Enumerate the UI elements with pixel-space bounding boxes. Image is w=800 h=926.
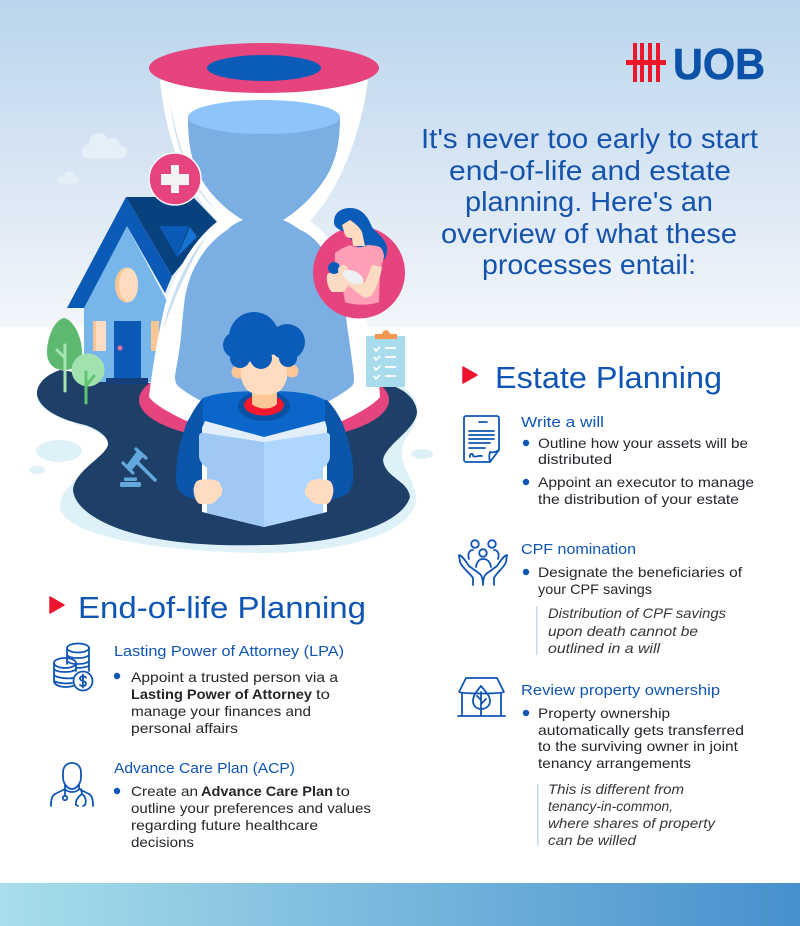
face	[241, 350, 287, 395]
icon: coins	[54, 644, 92, 690]
block: write a will: the distribution of your estate	[538, 491, 739, 507]
block: lasting power of attorney: Lasting Power of Attorney	[131, 686, 312, 702]
icon: clipboard	[366, 330, 405, 387]
clouds	[58, 133, 127, 184]
block: review property ownership: tenancy-in-common,	[548, 798, 673, 814]
icon: gavel	[120, 449, 155, 487]
block: cpf nomination: Designate the beneficiaries of	[538, 564, 742, 580]
title: overview of what these	[441, 218, 737, 249]
hourglass base	[139, 358, 389, 442]
panel: estate planning	[458, 360, 754, 848]
block: cpf nomination: outlined in a will	[548, 640, 661, 656]
block: advance care plan: regarding future healthcare	[131, 817, 318, 833]
block: advance care plan: Advance Care Plan	[201, 783, 333, 799]
block: write a will: Outline how your assets will be	[538, 435, 748, 451]
sand surface	[188, 100, 340, 134]
glass shading	[163, 102, 215, 330]
title: processes entail:	[482, 249, 696, 280]
block: lasting power of attorney: personal affairs	[131, 720, 238, 736]
arms and body	[176, 398, 353, 500]
block: review property ownership	[521, 683, 744, 848]
block: lasting power of attorney: Appoint a trusted person via a	[131, 669, 338, 685]
footer band	[0, 883, 800, 926]
block: cpf nomination: your CPF savings	[538, 581, 652, 597]
sand lower	[175, 220, 354, 402]
block: advance care plan: to	[336, 783, 350, 799]
block: lasting power of attorney: manage your finances and	[131, 703, 311, 719]
logo: UOB	[626, 40, 765, 89]
heading: end-of-life planning: End-of-life Planning	[78, 590, 366, 625]
block: write a will: distributed	[538, 451, 612, 467]
illustration: hourglass scene	[29, 43, 433, 553]
ground blobs	[29, 385, 433, 553]
hourglass glass	[149, 80, 380, 440]
block: cpf nomination: upon death cannot be	[548, 623, 698, 639]
sand upper	[188, 117, 340, 220]
block: review property ownership: Property ownership	[538, 705, 670, 721]
block: write a will	[521, 415, 754, 507]
block: lasting power of attorney: to	[316, 686, 330, 702]
block: review property ownership: to the surviving owner in joint	[538, 738, 738, 754]
block: advance care plan: Create an	[131, 783, 198, 799]
block: cpf nomination: CPF nomination	[521, 542, 636, 558]
icon: doctor	[51, 763, 93, 806]
block: review property ownership: can be willed	[548, 832, 637, 848]
sky background	[0, 0, 800, 327]
block: advance care plan: decisions	[131, 834, 194, 850]
panel: end-of-life planning	[50, 590, 371, 850]
block: review property ownership: where shares of property	[548, 815, 716, 831]
block: write a will: Appoint an executor to manage	[538, 474, 754, 490]
hourglass top opening	[207, 55, 321, 81]
block: advance care plan: outline your preferences and values	[131, 800, 371, 816]
marker: end-of-life planning	[50, 597, 64, 613]
block: review property ownership: This is different from	[548, 781, 684, 797]
block: cpf nomination: Distribution of CPF savings	[548, 605, 726, 621]
block: advance care plan	[114, 761, 371, 850]
hourglass top	[149, 43, 379, 93]
block: advance care plan: Advance Care Plan (ACP)	[114, 761, 295, 777]
icon: will document	[464, 416, 499, 462]
title	[421, 123, 758, 280]
marker: estate planning	[463, 367, 477, 383]
block: write a will: Write a will	[521, 415, 604, 431]
logo mark	[626, 43, 666, 82]
block: review property ownership: tenancy arrangements	[538, 755, 691, 771]
icon: house with leaf	[458, 678, 505, 716]
heading: estate planning: Estate Planning	[495, 360, 722, 395]
icon: mother and baby	[313, 208, 405, 318]
open book	[194, 421, 333, 527]
trees	[47, 318, 104, 403]
title: It's never too early to start	[421, 123, 758, 154]
house	[67, 197, 217, 384]
block: review property ownership: Review property ownership	[521, 683, 720, 699]
block: review property ownership: automatically gets transferred	[538, 722, 744, 738]
icon: medical cross	[149, 153, 201, 205]
logo wordmark: UOB	[673, 40, 765, 89]
title: end-of-life and estate	[449, 155, 731, 186]
icon: family in hands	[459, 540, 507, 585]
dark ground path	[37, 370, 417, 545]
hair	[223, 312, 305, 369]
person reading	[176, 312, 353, 500]
block: lasting power of attorney: Lasting Power of Attorney (LPA)	[114, 644, 344, 660]
block: cpf nomination	[521, 542, 742, 656]
collar	[238, 391, 290, 421]
block: lasting power of attorney	[114, 644, 344, 736]
title: planning. Here's an	[465, 186, 713, 217]
ears	[232, 366, 244, 378]
